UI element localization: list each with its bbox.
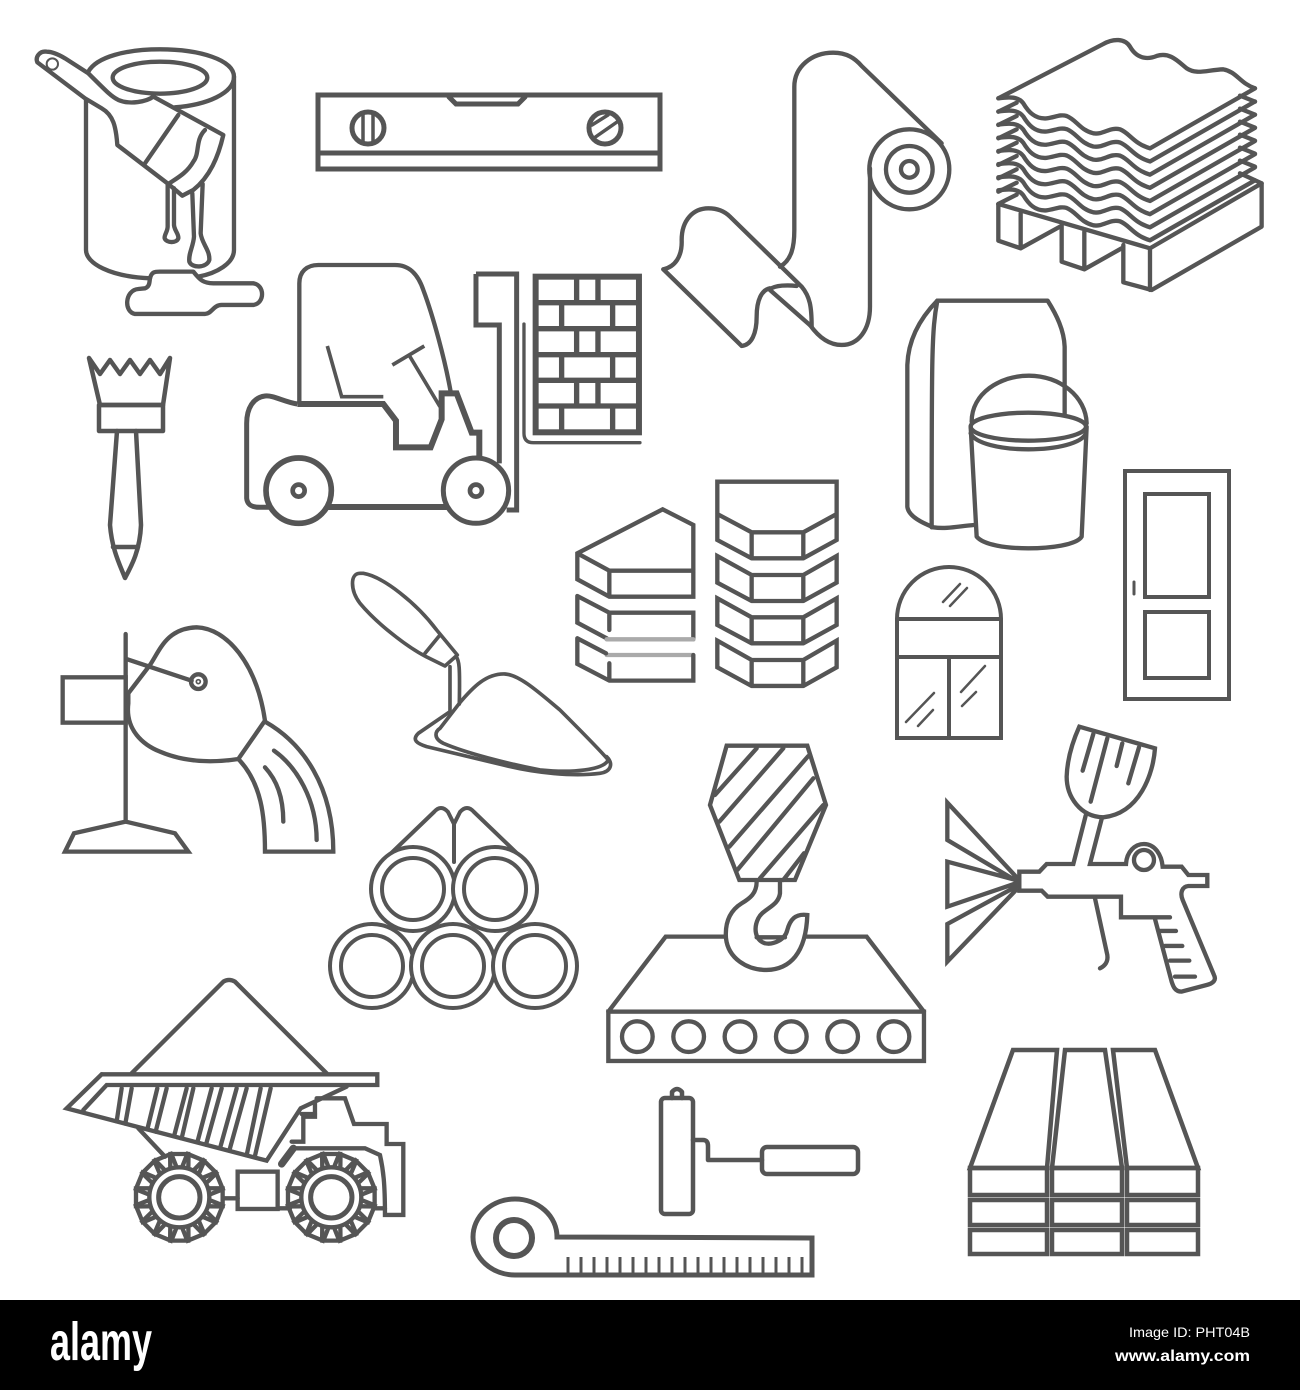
icon: cement bag and bucket: [907, 301, 1087, 548]
icon: arched window: [897, 567, 1001, 738]
icon: stacked sheets on pallet: [998, 40, 1262, 290]
icon: crane hook with concrete slab: [608, 746, 924, 1061]
icon: spray gun: [947, 727, 1215, 992]
footer bar: [0, 1300, 1300, 1390]
icon: stacked bricks: [577, 482, 837, 686]
icon: stacked pipes: [330, 808, 577, 1008]
icon: concrete mixer: [63, 627, 333, 852]
icon: forklift with bricks: [247, 265, 640, 523]
icon: trowel with mortar: [352, 573, 611, 775]
icon: tape measure: [473, 1199, 812, 1275]
footer bar: Image ID: PHT04B: [1129, 1324, 1250, 1340]
icon: paint roller: [661, 1089, 858, 1214]
footer bar: www.alamy.com: [1114, 1348, 1250, 1365]
icon: wallpaper roll: [663, 53, 949, 346]
footer bar: alamy: [50, 1312, 152, 1372]
icon: paint can with brush: [37, 49, 262, 314]
icon: spirit level: [318, 95, 660, 169]
icon: dump truck with sand: [67, 980, 403, 1241]
icon: wooden planks: [970, 1050, 1198, 1254]
icon: door: [1125, 471, 1229, 699]
icon: small paint brush: [89, 358, 170, 578]
